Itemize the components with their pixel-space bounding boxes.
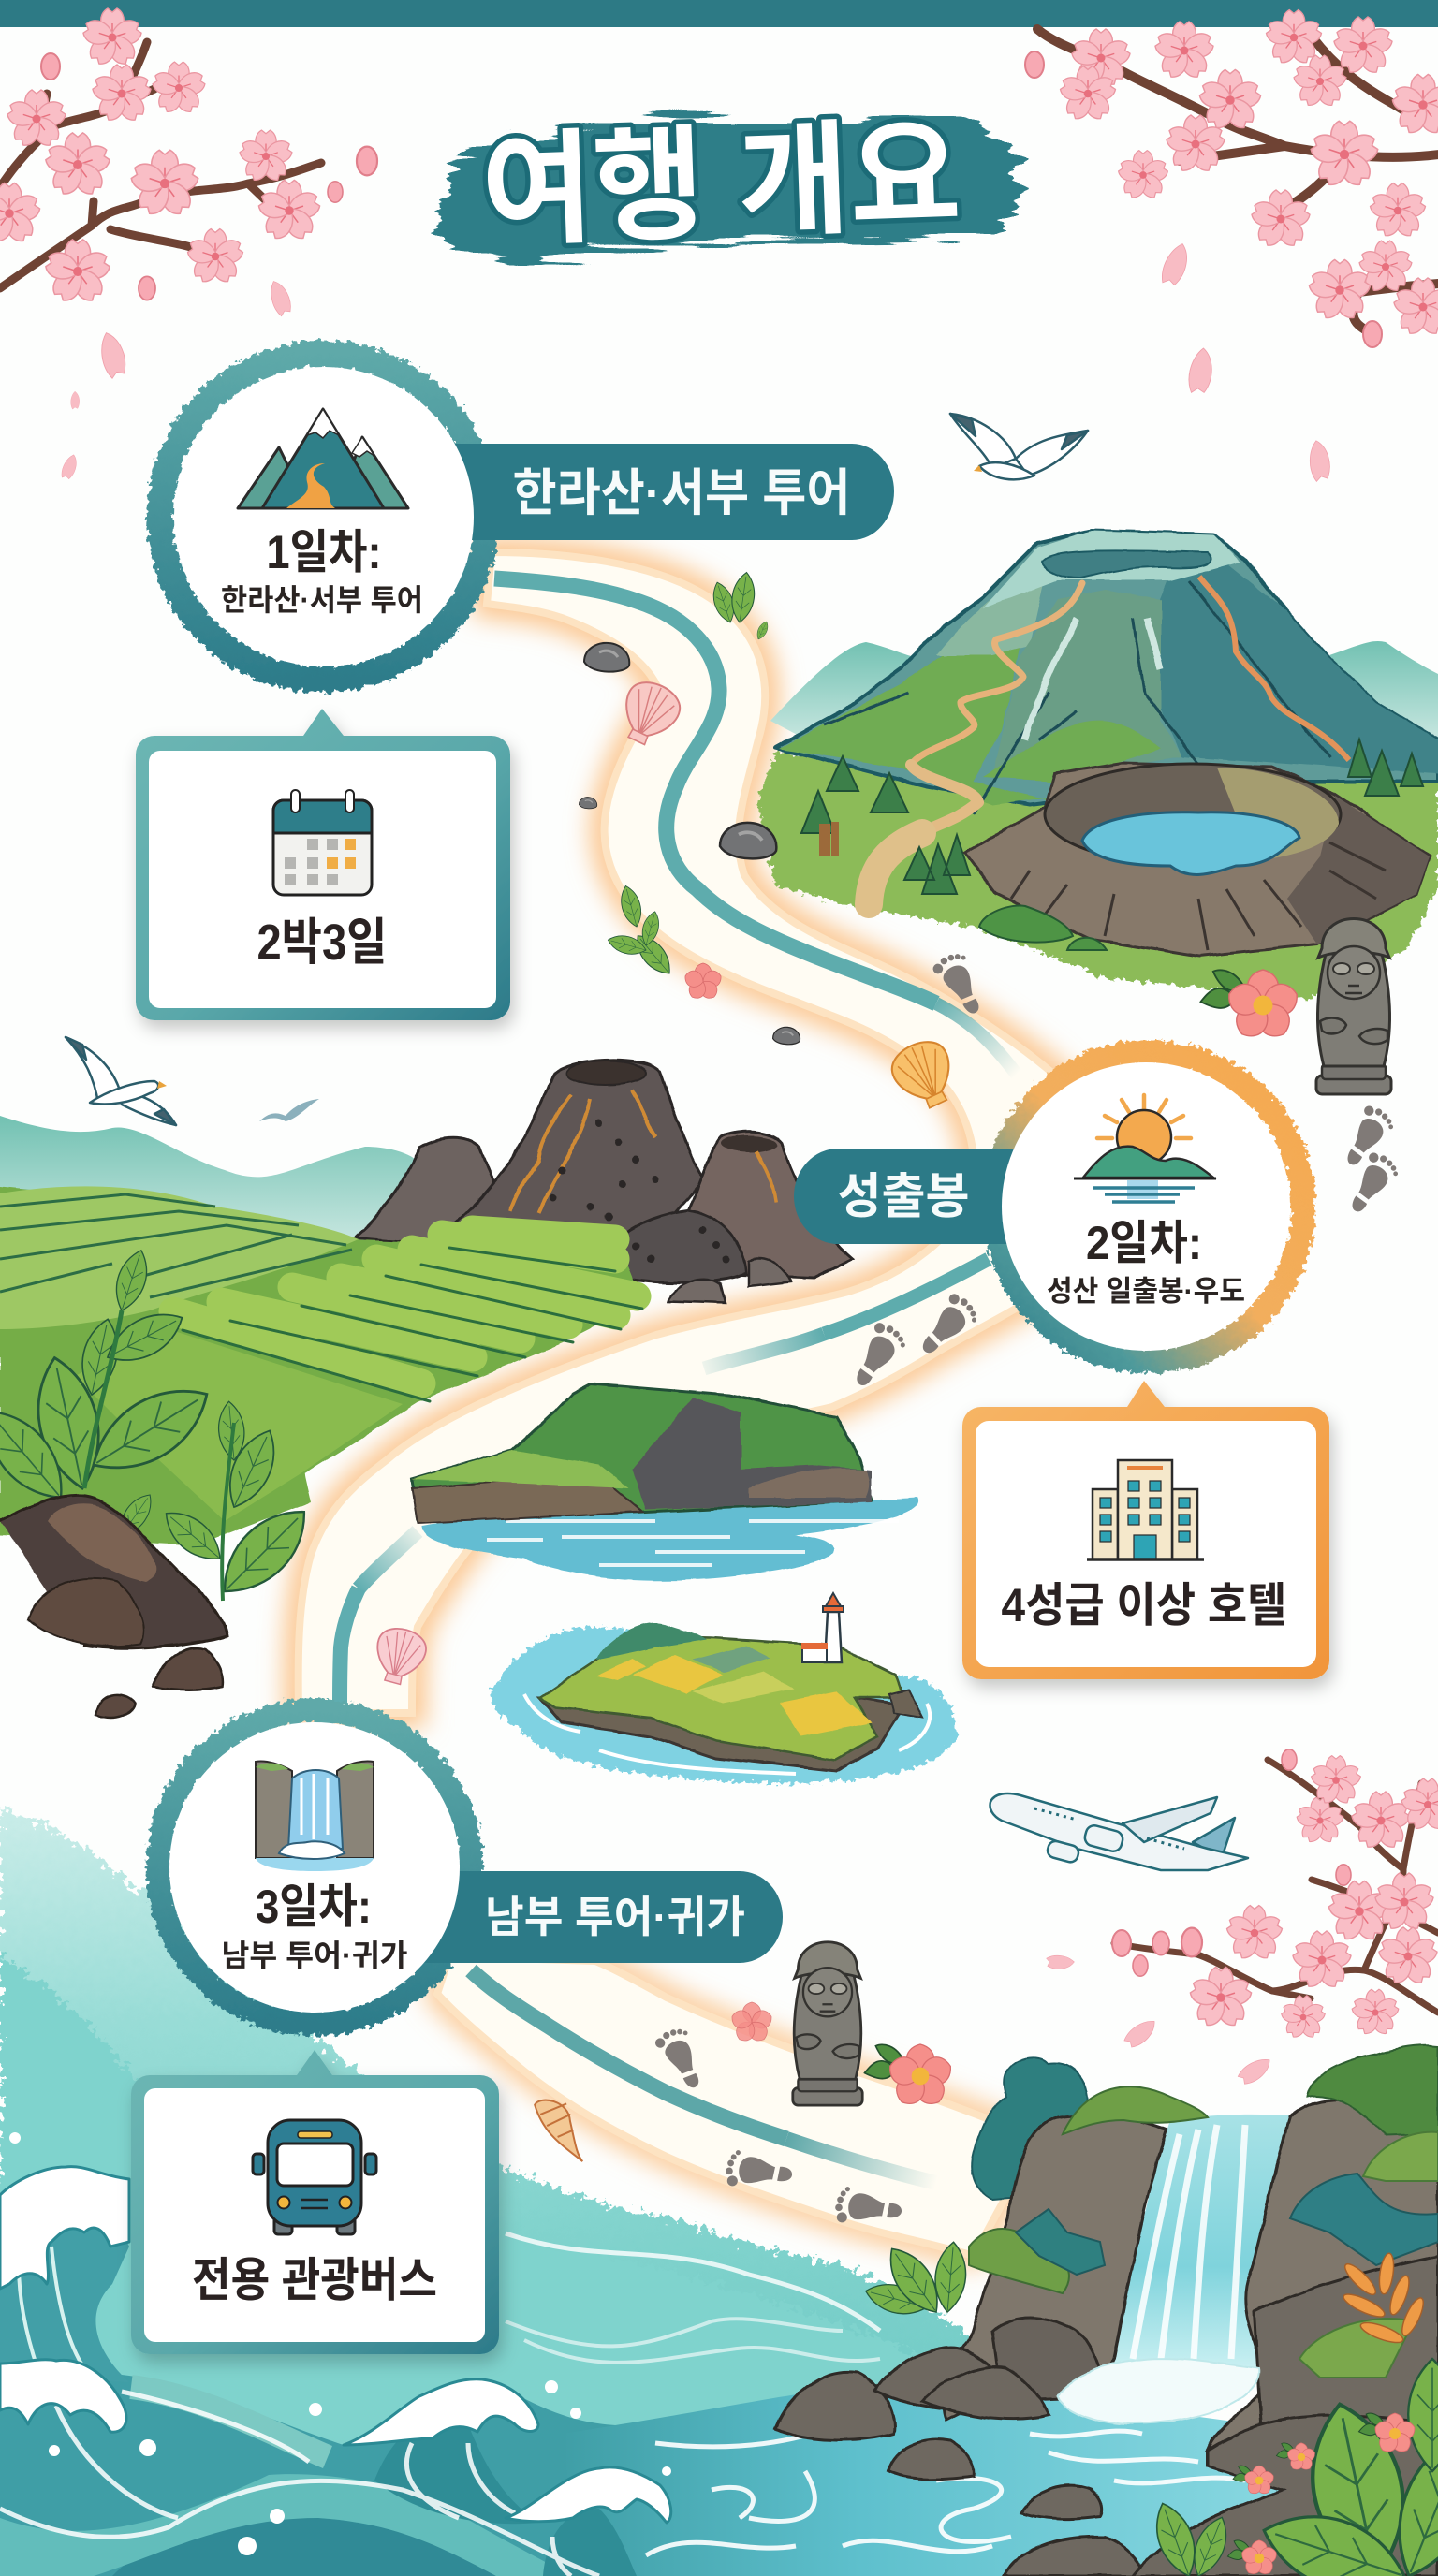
cherry branch top left <box>0 8 377 305</box>
day 3 sub label: 남부 투어·귀가 <box>221 1939 408 1972</box>
lava streaks <box>510 1090 775 1212</box>
crater lake <box>1082 812 1299 874</box>
seagull top <box>950 414 1088 479</box>
pill: 남부 투어·귀가 <box>412 1871 783 1963</box>
cone shaded side <box>1287 796 1430 944</box>
waterfall <box>1109 2115 1289 2368</box>
duration text: 2박3일 <box>257 915 388 971</box>
teal bush <box>972 2057 1088 2200</box>
Hallasan mountain <box>757 531 1438 999</box>
icon: sunrise <box>1074 1095 1216 1202</box>
day 2 label: 2일차: <box>1086 1217 1202 1269</box>
callout: 2박3일 <box>136 709 510 1020</box>
day 2 sub label: 성산 일출봉·우도 <box>1047 1275 1245 1308</box>
light wave band upper <box>131 2387 328 2457</box>
cone ridges <box>1011 842 1386 950</box>
lava rock pile <box>0 1495 227 1718</box>
teal shrub right <box>1290 2174 1438 2265</box>
small flower <box>729 2002 774 2044</box>
bus text: 전용 관광버스 <box>192 2254 437 2306</box>
crater interior <box>1045 764 1341 865</box>
teal fern <box>1016 2209 1105 2275</box>
icon: hotel <box>1087 1460 1204 1559</box>
main cone <box>442 1060 704 1250</box>
decorations along road 1 <box>579 571 964 1116</box>
pill: 한라산·서부 투어: 한라산·서부 투어 <box>513 465 850 521</box>
day 3 label: 3일차: <box>256 1881 372 1933</box>
hiker <box>819 822 839 856</box>
day 2 node <box>794 1052 1303 1361</box>
Udo island water <box>490 1627 957 1783</box>
title brush stroke <box>435 120 1020 264</box>
crater cone <box>965 763 1430 957</box>
ring <box>158 1711 471 2024</box>
tea plants <box>0 1246 321 1608</box>
mountain body <box>775 531 1438 814</box>
lighthouse <box>801 1593 844 1662</box>
foam pool <box>1057 2359 1259 2424</box>
Udo island <box>540 1623 922 1771</box>
grass tuft <box>862 2239 969 2321</box>
icon: calendar <box>273 790 372 895</box>
statue: dolharubang 1 <box>1316 919 1391 1094</box>
light wave band lower <box>0 2474 571 2576</box>
travel road: day 1 to day 3 <box>299 552 1077 2256</box>
right cone <box>688 1132 852 1278</box>
volcanoes <box>354 1060 852 1303</box>
airplane <box>990 1793 1248 1870</box>
moss on left rock <box>969 2086 1208 2293</box>
icon: mountain <box>238 409 408 508</box>
main crater <box>567 1061 646 1085</box>
pool swirls <box>646 2420 1245 2555</box>
title: 여행 개요 <box>479 107 963 261</box>
shell by stripe <box>369 1623 430 1689</box>
small cone left <box>354 1137 506 1245</box>
pill: 남부 투어·귀가: 남부 투어·귀가 <box>485 1893 745 1941</box>
front terrace rows <box>173 1230 642 1401</box>
boulders <box>775 2348 1438 2576</box>
field base <box>0 1187 642 1545</box>
cherry branch lower right <box>1112 1749 1438 2040</box>
lava line <box>1199 577 1349 760</box>
top band <box>0 0 1438 27</box>
seagull left <box>66 1037 176 1125</box>
back terraces <box>0 1186 359 1329</box>
footprints <box>653 947 1402 2228</box>
trail <box>869 583 1082 904</box>
teal route stripe <box>340 578 1017 2183</box>
pine trees <box>801 739 1423 894</box>
left rocks <box>943 2115 1167 2420</box>
barrel under crest 4 <box>543 2509 637 2576</box>
wave lines <box>0 2392 599 2576</box>
rock pores <box>552 1123 726 1259</box>
icon: bus <box>253 2120 376 2234</box>
falling petals <box>60 241 1332 2087</box>
disc <box>169 1722 460 2012</box>
ring <box>994 1052 1303 1361</box>
tea field <box>0 1186 642 1545</box>
Seongsan island <box>412 1383 872 1523</box>
callout: 전용 관광버스 <box>131 2050 499 2354</box>
statue: dolharubang 2 <box>793 1942 862 2105</box>
waterfall scene <box>775 2045 1438 2576</box>
pill: 성출봉 <box>794 1149 1030 1244</box>
foam dots <box>9 2132 671 2555</box>
disc <box>174 367 474 666</box>
foreground leaves <box>1147 2359 1438 2576</box>
right crater <box>721 1135 777 1152</box>
deep sea waves <box>0 2359 1311 2576</box>
barrel under crest 3 <box>374 2421 538 2524</box>
lava rocks <box>603 1210 746 1282</box>
right rocks <box>1208 2100 1438 2471</box>
disc <box>1002 1062 1290 1351</box>
pill: 한라산·서부 투어 <box>440 444 894 540</box>
background hills left <box>0 1116 449 1254</box>
hotel text: 4성급 이상 호텔 <box>1002 1579 1286 1632</box>
dark trough <box>112 2516 496 2576</box>
bushes <box>979 905 1107 950</box>
lower meadow <box>75 1329 403 1521</box>
ground <box>757 739 1438 999</box>
day 1 sub label: 한라산·서부 투어 <box>221 583 423 617</box>
green bush right <box>1307 2045 1438 2136</box>
flower red 2 <box>865 2044 955 2110</box>
fall streaks <box>1133 2125 1245 2359</box>
moss on right rock <box>1299 2132 1438 2378</box>
white and coral flowers <box>1227 2413 1417 2576</box>
Seongsan island water <box>421 1498 918 1580</box>
pill: 성출봉: 성출봉 <box>837 1170 970 1224</box>
orange fern <box>1341 2252 1428 2347</box>
icon: waterfall <box>256 1762 374 1871</box>
cherry branch top right <box>1025 10 1438 347</box>
day 1 label: 1일차: <box>266 526 382 578</box>
flower red 1 <box>1200 970 1301 1043</box>
small bird <box>259 1099 319 1121</box>
background hills <box>770 641 1438 749</box>
sea background <box>0 1807 1067 2576</box>
callout: 4성급 이상 호텔 <box>962 1381 1329 1679</box>
spiral shell <box>533 2090 595 2169</box>
day 3 node <box>158 1711 783 2024</box>
ring <box>160 354 486 680</box>
big wave barrel <box>0 2222 129 2382</box>
day 1 node <box>160 354 894 680</box>
wave foam crests <box>0 2167 671 2523</box>
